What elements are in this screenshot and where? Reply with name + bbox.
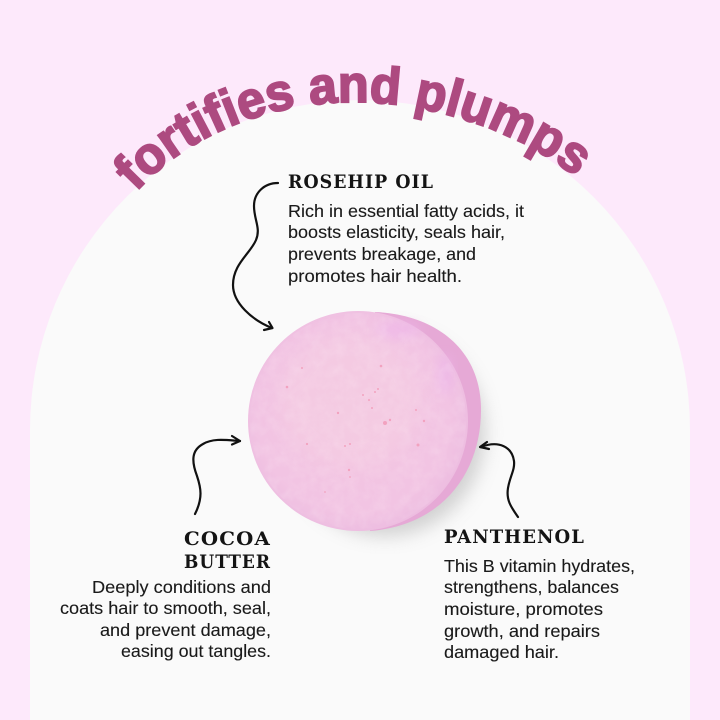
title: fortifies and plumps: fortifies and plumps: [114, 65, 588, 190]
arch panel: [30, 100, 690, 720]
text block: panthenol: [444, 527, 635, 662]
text block: panthenol: This B vitamin hydrates,: [444, 556, 635, 576]
soap bar: [248, 311, 485, 536]
text block: cocoa butter: easing out tangles.: [121, 641, 271, 661]
arrow: cocoa butter: [193, 436, 240, 514]
text block: panthenol: growth, and repairs: [444, 621, 600, 641]
text block: rosehip oil: Rich in essential fatty acids, it: [288, 201, 524, 221]
text block: cocoa butter: Deeply conditions and: [92, 577, 271, 597]
text block: cocoa butter: and prevent damage,: [100, 620, 271, 640]
text block: cocoa butter: coats hair to smooth, seal,: [60, 598, 271, 618]
text block: rosehip oil: [288, 172, 524, 286]
arrow: panthenol: [480, 442, 518, 517]
text block: cocoa butter: [60, 529, 271, 661]
text block: rosehip oil: ROSEHIP OIL: [288, 172, 434, 193]
arrow: rosehip oil: [233, 183, 278, 330]
text block: panthenol: strengthens, balances: [444, 577, 619, 597]
text block: panthenol: moisture, promotes: [444, 599, 603, 619]
text block: panthenol: damaged hair.: [444, 642, 559, 662]
text block: rosehip oil: boosts elasticity, seals hair,: [288, 222, 505, 242]
text block: rosehip oil: promotes hair health.: [288, 266, 462, 286]
text block: cocoa butter: COCOA: [184, 529, 271, 550]
text block: rosehip oil: prevents breakage, and: [288, 244, 476, 264]
text block: panthenol: PANTHENOL: [444, 527, 585, 548]
text block: cocoa butter: BUTTER: [184, 552, 271, 573]
